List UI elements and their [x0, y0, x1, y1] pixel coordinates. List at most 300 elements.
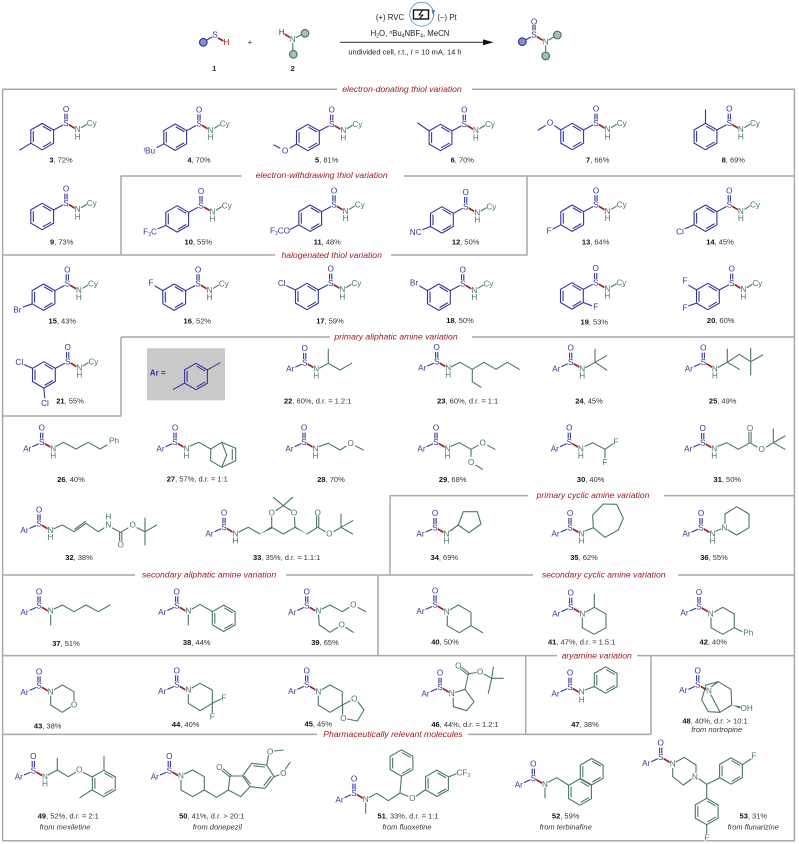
- compound 21: [15, 343, 99, 408]
- compound 32: O: [130, 521, 136, 530]
- compound 35: S: [567, 523, 573, 532]
- compound 6: Cy: [485, 120, 496, 129]
- compound 23: [418, 343, 519, 405]
- compound 3: S: [63, 119, 69, 128]
- compound 40: [416, 586, 483, 647]
- compound 46: S: [437, 683, 443, 692]
- compound 21: H: [76, 371, 82, 380]
- compound 33: Ar: [205, 529, 214, 538]
- compound 36: Ar: [682, 530, 691, 539]
- compound 25: [685, 344, 763, 405]
- compound 41: O: [568, 589, 574, 598]
- compound 38: N: [185, 607, 191, 616]
- compound 25: S: [701, 358, 707, 367]
- compound 16: S: [195, 280, 201, 289]
- compound 31: H: [711, 452, 717, 461]
- compound 41: Ar: [552, 609, 561, 618]
- compound 11: F: [270, 226, 275, 235]
- electrolysis conditions: (−) Pt: [437, 13, 457, 22]
- compound 17: S: [328, 279, 334, 288]
- compound 44: 44, 40%: [172, 720, 200, 729]
- compound 53: 53, 31%: [740, 812, 767, 821]
- compound 26: Ph: [109, 437, 119, 446]
- compound 50: O: [166, 752, 172, 761]
- electrolysis conditions: NBF: [405, 29, 420, 38]
- compound 40: O: [432, 586, 438, 595]
- compound 3: Cy: [87, 119, 98, 128]
- compound 33: O: [326, 530, 332, 539]
- compound 26: [23, 424, 119, 484]
- compound 41: 41, 47%, d.r. = 1.5:1: [548, 638, 615, 647]
- compound 24: H: [579, 371, 585, 380]
- heading: halogenated thiol variation: halogenated thiol variation: [282, 250, 382, 260]
- compound 49: H: [42, 780, 48, 789]
- thiol reagent 1: [200, 30, 230, 73]
- electrolysis conditions: 4: [402, 34, 405, 40]
- compound 42: Ph: [743, 628, 754, 637]
- electrolysis conditions: 4: [420, 34, 423, 40]
- compound 43: [20, 667, 77, 730]
- electrolysis conditions: Bu: [392, 29, 402, 38]
- compound 7: N: [605, 125, 611, 134]
- compound 22: O: [302, 344, 308, 353]
- compound 23: Ar: [418, 364, 427, 373]
- compound 3: 3, 72%: [49, 156, 73, 165]
- compound 37: N: [48, 607, 54, 616]
- compound 31: O: [747, 424, 753, 433]
- compound 21: 21, 55%: [56, 397, 84, 406]
- compound 34: N: [444, 530, 450, 539]
- compound 17: Cl: [278, 279, 286, 288]
- compound 29: O: [433, 424, 439, 433]
- compound 42: N: [708, 610, 714, 619]
- compound 6: N: [473, 126, 479, 135]
- compound 36: [682, 507, 749, 562]
- compound 6: 6, 70%: [451, 156, 474, 165]
- compound 42: S: [696, 602, 702, 611]
- compound 14: Cl: [676, 227, 684, 236]
- compound 14: N: [738, 207, 744, 216]
- compound 15: S: [65, 280, 71, 289]
- compound 16: Cy: [219, 280, 230, 289]
- compound 10: H: [210, 215, 216, 224]
- compound 5: O: [282, 146, 288, 155]
- compound 28: O: [301, 424, 307, 433]
- compound 7: [538, 105, 628, 165]
- compound 15: Br: [13, 306, 22, 315]
- compound 39: 39, 65%: [311, 638, 339, 647]
- compound 26: Ar: [23, 444, 32, 453]
- compound 18: Br: [410, 278, 418, 287]
- compound 19: H: [604, 292, 610, 301]
- compound 33: 33, 35%, d.r. = 1.1:1: [253, 553, 320, 562]
- compound 19: 19, 53%: [581, 317, 608, 326]
- compound 29: S: [433, 438, 439, 447]
- compound 43: N: [48, 687, 54, 696]
- compound 4: H: [208, 133, 214, 142]
- heading: electron-withdrawing thiol variation: electron-withdrawing thiol variation: [256, 170, 388, 180]
- compound 3: N: [75, 125, 81, 134]
- compound 47: Ar: [551, 689, 560, 698]
- electrolysis conditions: (+) RVC: [376, 13, 404, 22]
- compound 34: Ar: [416, 530, 425, 539]
- compound 12: S: [463, 202, 469, 211]
- compound 44: O: [174, 666, 180, 675]
- compound 13: F: [546, 227, 552, 236]
- compound 7: Cy: [617, 119, 628, 128]
- compound 53: Ar: [642, 759, 651, 768]
- compound 37: 37, 51%: [52, 639, 80, 648]
- compound 53: F: [751, 752, 757, 761]
- compound 25: O: [700, 344, 706, 353]
- compound 51: 51, 33%, d.r. = 1:1: [377, 812, 439, 821]
- compound 46: Ar: [421, 689, 430, 698]
- compound 17: [278, 265, 362, 326]
- compound 33: O: [315, 508, 321, 517]
- compound 37: S: [36, 602, 42, 611]
- compound 22: 22, 60%, d.r. = 1.2:1: [284, 397, 351, 406]
- compound 3: O: [63, 105, 69, 114]
- thiol reagent 1: S: [212, 30, 218, 40]
- compound 31: O: [759, 445, 765, 454]
- compound 49: from mexiletine: [40, 822, 90, 831]
- compound 21: S: [65, 357, 71, 366]
- compound 48: 48, 40%, d.r. > 10:1: [682, 717, 748, 726]
- compound 3: H: [75, 132, 81, 141]
- compound 12: O: [463, 188, 469, 197]
- compound 33: N: [233, 529, 239, 538]
- compound 52: [515, 758, 603, 831]
- compound 53: F: [704, 833, 709, 842]
- compound 11: N: [343, 207, 349, 216]
- compound 39: O: [350, 601, 356, 610]
- compound 16: F: [148, 278, 154, 287]
- compound 20: H: [740, 292, 746, 301]
- compound 10: [143, 187, 233, 246]
- compound 4: N: [208, 126, 214, 135]
- compound 35: [551, 504, 623, 562]
- compound 7: H: [605, 132, 611, 141]
- compound 42: [680, 588, 754, 647]
- compound 41: [548, 589, 615, 647]
- compound 13: H: [605, 214, 611, 223]
- compound 23: 23, 60%, d.r. = 1:1: [437, 396, 498, 405]
- compound 14: O: [726, 186, 732, 195]
- compound 33: [205, 497, 353, 562]
- compound 8: O: [726, 105, 732, 114]
- electrolysis conditions: 2: [376, 34, 379, 40]
- compound 34: 34, 69%: [431, 553, 458, 562]
- compound 7: O: [593, 105, 599, 114]
- compound 5: Cy: [352, 120, 363, 129]
- compound 39: O: [339, 621, 345, 630]
- compound 12: Cy: [486, 202, 497, 211]
- compound 21: N: [76, 364, 82, 373]
- compound 39: S: [304, 602, 310, 611]
- compound 29: O: [468, 458, 474, 467]
- compound 50: N: [178, 772, 184, 781]
- compound 12: [410, 188, 497, 246]
- compound 29: Ar: [417, 444, 426, 453]
- compound 49: N: [42, 772, 48, 781]
- compound 23: H: [445, 371, 451, 380]
- compound 22: S: [302, 358, 308, 367]
- amine reagent 2: 2: [291, 64, 295, 73]
- compound 48: Ar: [679, 686, 688, 695]
- compound 27: N: [184, 444, 190, 453]
- compound 8: 8, 69%: [722, 156, 745, 165]
- compound 42: 42, 40%: [700, 638, 727, 647]
- compound 27: Ar: [156, 444, 165, 453]
- compound 45: [288, 666, 364, 729]
- compound 19: N: [604, 285, 610, 294]
- compound 21: Cl: [15, 358, 23, 367]
- compound 26: O: [39, 424, 45, 433]
- compound 10: N: [210, 207, 216, 216]
- compound 13: N: [605, 207, 611, 216]
- compound 41: N: [579, 610, 585, 619]
- compound 31: O: [700, 424, 706, 433]
- compound 17: Cy: [351, 279, 362, 288]
- compound 45: O: [340, 714, 346, 723]
- compound 45: O: [351, 695, 357, 704]
- compound 50: O: [280, 769, 286, 778]
- product general structure: N: [543, 37, 549, 46]
- compound 50: Ar: [151, 773, 159, 782]
- compound 10: F: [143, 227, 148, 236]
- compound 30: F: [613, 437, 619, 446]
- compound 49: S: [31, 766, 37, 775]
- electrolysis conditions: O,: [379, 29, 389, 38]
- compound 12: N: [474, 208, 480, 217]
- compound 31: N: [711, 445, 717, 454]
- compound 32: H: [105, 512, 111, 522]
- compound 52: Ar: [515, 780, 523, 789]
- compound 11: [270, 186, 366, 246]
- compound 40: Ar: [416, 607, 425, 616]
- compound 39: [288, 587, 366, 647]
- compound 27: H: [184, 451, 190, 460]
- compound 49: O: [30, 752, 36, 761]
- compound 24: S: [568, 358, 574, 367]
- compound 36: 36, 55%: [700, 553, 728, 562]
- compound 35: O: [567, 509, 573, 518]
- compound 30: Ar: [551, 444, 559, 453]
- compound 16: 16, 52%: [184, 317, 211, 326]
- compound 11: 3: [275, 231, 278, 237]
- compound 9: Cy: [87, 199, 98, 208]
- compound 25: N: [712, 364, 718, 373]
- compound 12: NC: [410, 228, 422, 237]
- compound 45: O: [304, 666, 310, 675]
- compound 30: [551, 424, 619, 484]
- compound 36: H: [710, 537, 716, 546]
- compound 28: O: [348, 439, 354, 448]
- compound 49: [15, 752, 115, 831]
- compound 50: O: [267, 747, 273, 756]
- compound 35: H: [579, 537, 585, 546]
- compound 30: 30, 40%: [577, 475, 605, 484]
- compound 39: O: [304, 587, 310, 596]
- heading: Pharmaceutically relevant molecules: Pharmaceutically relevant molecules: [323, 729, 463, 739]
- electrolysis conditions: [348, 2, 462, 56]
- compound 14: 14, 45%: [706, 237, 734, 246]
- compound 5: [274, 106, 363, 165]
- compound 53: from flunarizine: [728, 822, 779, 831]
- compound 8: N: [738, 125, 744, 134]
- compound 15: [13, 265, 99, 326]
- compound 26: H: [50, 451, 56, 460]
- compound 19: [560, 264, 627, 326]
- compound 13: S: [593, 201, 599, 210]
- compound 34: O: [432, 509, 438, 518]
- compound 8: H: [738, 132, 744, 141]
- compound 9: 9, 73%: [50, 237, 74, 246]
- compound 9: [31, 185, 98, 246]
- compound 4: Cy: [220, 120, 231, 129]
- compound 18: [410, 265, 494, 325]
- compound 46: 46, 44%, d.r. = 1.2:1: [431, 720, 499, 729]
- compound 17: O: [328, 265, 334, 274]
- compound 26: S: [39, 438, 45, 447]
- compound 51: 3: [467, 773, 470, 779]
- compound 34: [416, 509, 481, 562]
- compound 24: [552, 344, 607, 405]
- compound 46: O: [477, 667, 483, 676]
- Ar definition box: Ar =: [150, 368, 166, 378]
- compound 47: 47, 38%: [571, 720, 599, 729]
- compound 10: C: [151, 227, 157, 236]
- heading: secondary aliphatic amine variation: secondary aliphatic amine variation: [142, 570, 276, 580]
- compound 31: S: [700, 438, 706, 447]
- compound 26: N: [50, 444, 56, 453]
- compound 7: S: [593, 119, 599, 128]
- compound 5: S: [329, 120, 335, 129]
- compound 13: [546, 186, 628, 246]
- electrolysis conditions: undivided cell, r.t., I = 10 mA, 14 h: [348, 47, 462, 56]
- compound 43: O: [71, 701, 77, 710]
- compound 46: [421, 661, 503, 729]
- compound 31: Ar: [684, 445, 693, 454]
- compound 22: Ar: [286, 365, 295, 374]
- compound 8: Cy: [750, 119, 761, 128]
- compound 34: H: [444, 537, 450, 546]
- thiol reagent 1: 1: [212, 64, 217, 73]
- compound 20: S: [729, 279, 735, 288]
- compound 28: [285, 424, 363, 484]
- thiol reagent 1: H: [224, 38, 230, 47]
- compound 30: O: [566, 424, 572, 433]
- compound 53: O: [658, 739, 664, 748]
- compound 53: [642, 739, 779, 842]
- compound 28: Ar: [285, 444, 294, 453]
- compound 29: 29, 68%: [439, 475, 467, 484]
- compound 46: O: [455, 661, 461, 670]
- compound 6: H: [473, 133, 479, 142]
- compound 29: N: [445, 444, 451, 453]
- compound 27: 27, 57%, d.r. = 1:1: [167, 475, 228, 484]
- compound 10: 10, 55%: [185, 237, 212, 246]
- compound 28: H: [313, 451, 319, 460]
- compound 4: Bu: [145, 146, 155, 155]
- compound 39: N: [315, 607, 321, 616]
- compound 49: Ar: [15, 773, 23, 782]
- compound 35: Ar: [551, 530, 560, 539]
- compound 44: F: [221, 693, 227, 702]
- compound 40: S: [432, 601, 438, 610]
- compound 17: 17, 59%: [316, 317, 344, 326]
- compound 33: O: [291, 508, 297, 517]
- compound 52: S: [531, 774, 537, 783]
- compound 7: 7, 66%: [586, 156, 610, 165]
- compound 7: O: [547, 118, 553, 127]
- compound 48: O: [695, 666, 701, 675]
- compound 12: 12, 50%: [452, 237, 480, 246]
- compound 3: [20, 105, 98, 165]
- compound 52: N: [542, 780, 548, 789]
- compound 48: OH: [741, 704, 753, 713]
- compound 40: 40, 50%: [431, 638, 459, 647]
- compound 18: S: [460, 280, 466, 289]
- compound 5: O: [329, 106, 335, 115]
- compound 32: S: [36, 520, 42, 529]
- compound 10: Cy: [222, 201, 233, 210]
- compound 51: [335, 750, 470, 831]
- compound 10: O: [198, 187, 204, 196]
- compound 36: O: [698, 509, 704, 518]
- compound 43: O: [36, 667, 42, 676]
- compound 46: N: [449, 689, 455, 698]
- compound 21: Cy: [88, 357, 99, 366]
- compound 17: N: [339, 285, 345, 294]
- compound 11: CO: [278, 226, 290, 235]
- compound 16: [148, 265, 230, 326]
- compound 15: Cy: [88, 280, 99, 289]
- compound 29: [417, 424, 495, 484]
- compound 51: O: [409, 794, 415, 803]
- compound 45: 45, 45%: [305, 720, 332, 729]
- heading: aryamine variation: aryamine variation: [562, 650, 632, 660]
- compound 4: [144, 105, 231, 165]
- compound 20: 20, 60%: [707, 316, 735, 325]
- compound 31: [684, 424, 785, 484]
- compound 32: [20, 505, 157, 562]
- compound 13: Cy: [617, 201, 628, 210]
- compound 46: O: [437, 669, 443, 678]
- compound 50: 50, 41%, d.r. > 20:1: [179, 812, 244, 821]
- compound 4: 4, 70%: [187, 156, 211, 165]
- compound 28: N: [313, 444, 319, 453]
- compound 51: Ar: [335, 795, 344, 804]
- compound 31: 31, 50%: [714, 475, 741, 484]
- compound 42: Ar: [680, 609, 689, 618]
- compound 20: N: [740, 285, 746, 294]
- compound 47: S: [567, 683, 573, 692]
- compound 23: O: [434, 343, 440, 352]
- compound 32: O: [36, 505, 42, 514]
- compound 11: 11, 48%: [314, 237, 341, 246]
- compound 34: S: [432, 523, 438, 532]
- compound 44: Ar: [158, 687, 167, 696]
- compound 47: N: [579, 687, 585, 696]
- compound 4: t: [144, 147, 146, 153]
- amine reagent 2: N: [290, 35, 296, 44]
- compound 26: 26, 40%: [57, 475, 85, 484]
- compound 32: N: [105, 521, 111, 530]
- compound 32: O: [118, 541, 124, 550]
- compound 47: H: [579, 695, 585, 704]
- compound 49: 49, 52%, d.r. = 2:1: [38, 812, 99, 821]
